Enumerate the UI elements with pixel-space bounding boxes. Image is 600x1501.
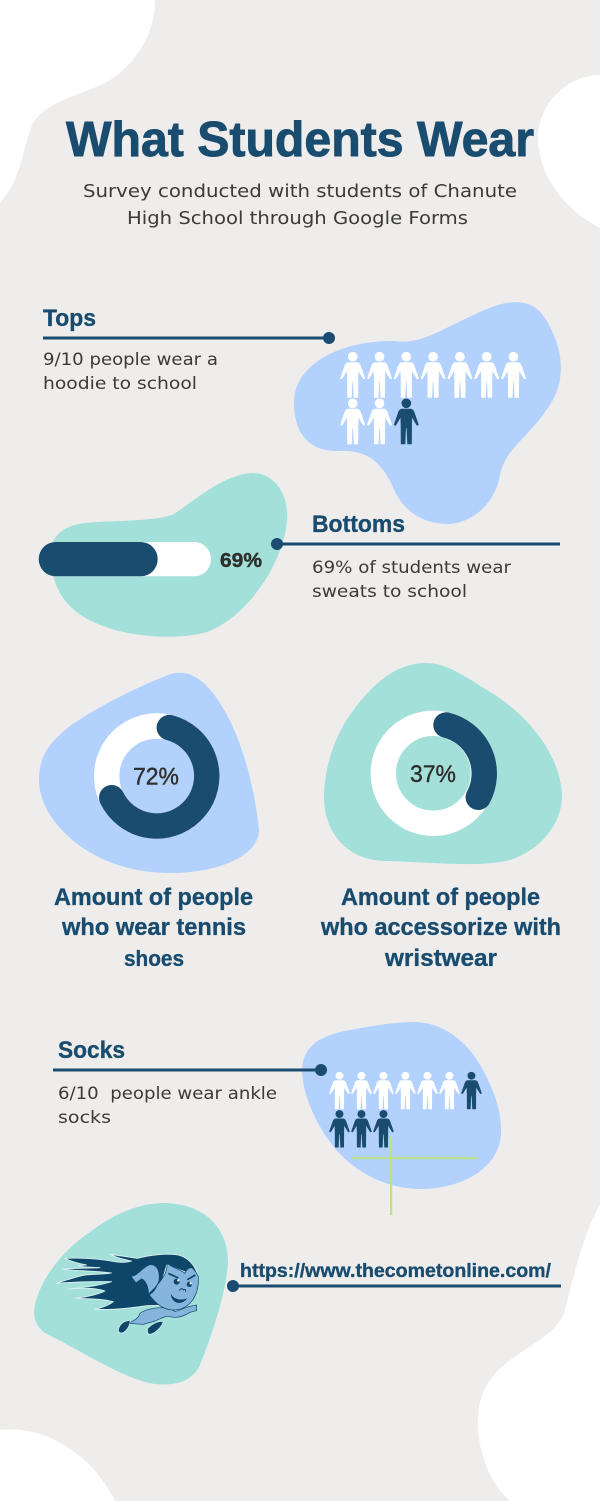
text: tops: hoodie to school [43, 374, 197, 394]
heading: tennis shoes [54, 884, 253, 971]
value: 72%: 72% [133, 764, 179, 790]
text: socks [58, 1084, 277, 1128]
text: tops: 9/10 people wear a [43, 350, 218, 370]
heading: tennis shoes: shoes [124, 946, 184, 971]
text: socks: 6/10 people wear ankle [58, 1084, 277, 1104]
text: tops [43, 350, 218, 394]
heading: socks: Socks [58, 1037, 125, 1064]
title: What Students Wear [66, 113, 534, 167]
donut chart 37% [383, 723, 484, 823]
blob: tops [294, 302, 561, 524]
heading: wristwear: who accessorize with [320, 914, 561, 941]
link: website url: https://www.thecometonline.com/ [240, 1260, 552, 1282]
subtitle [83, 182, 517, 229]
heading: wristwear: Amount of people [341, 884, 540, 911]
heading: wristwear [320, 884, 561, 972]
heading: tennis shoes: Amount of people [54, 884, 253, 911]
value: 37%: 37% [410, 761, 456, 788]
text: bottoms [312, 558, 511, 602]
heading: tops: Tops [43, 305, 96, 332]
subtitle: Survey conducted with students of Chanute [83, 182, 517, 202]
panel: wristwear [320, 663, 562, 972]
panel: tops [43, 302, 561, 524]
text: socks: socks [58, 1108, 111, 1128]
panel: socks [53, 1022, 501, 1215]
text: bottoms: sweats to school [312, 582, 467, 602]
progress bar 69% [39, 542, 211, 576]
heading: tennis shoes: who wear tennis [61, 914, 246, 941]
heading: wristwear: wristwear [384, 945, 497, 972]
text: bottoms: 69% of students wear [312, 558, 511, 578]
value: 69%: 69% [220, 550, 262, 572]
icon: comet mascot [56, 1254, 198, 1334]
blob: tennis shoes [39, 673, 259, 873]
panel: tennis shoes [39, 673, 259, 971]
connector: bottoms [271, 538, 560, 550]
pictogram: 9 of 10 hoodies [340, 352, 526, 444]
pictogram: 6 of 10 ankle socks [329, 1072, 482, 1147]
blob: socks [302, 1022, 501, 1189]
connector: website [227, 1280, 561, 1292]
panel: website [34, 1203, 561, 1384]
subtitle: High School through Google Forms [127, 209, 468, 229]
panel: bottoms [39, 473, 560, 637]
blob: comet [34, 1203, 228, 1384]
donut chart 72% [107, 726, 207, 826]
connector: socks [53, 1064, 327, 1076]
connector: tops [43, 332, 335, 344]
blob: bottoms [50, 473, 287, 637]
heading: bottoms: Bottoms [312, 511, 405, 538]
blob: wristwear [324, 663, 562, 864]
